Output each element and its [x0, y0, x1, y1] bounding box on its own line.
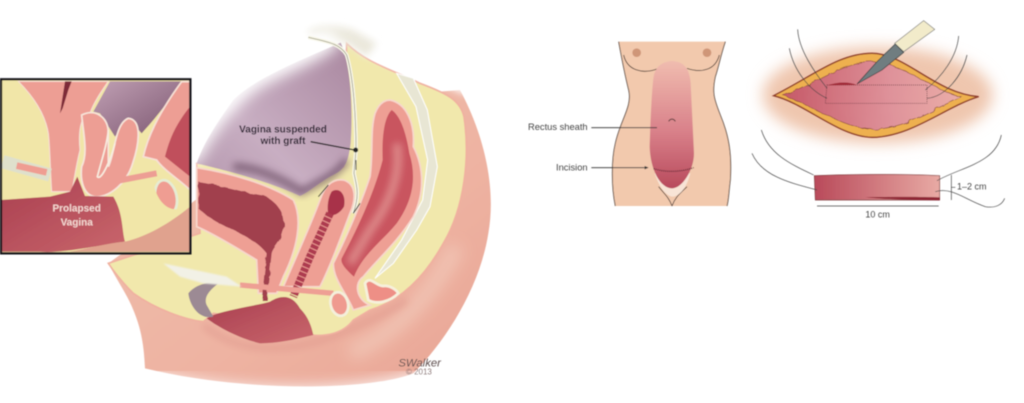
inset label: prolapsed vagina [53, 203, 101, 228]
inset label: prolapsed vagina: Prolapsed [53, 203, 101, 214]
fat border [774, 53, 979, 137]
cavity bottom shadow [233, 160, 347, 192]
vulva and vestibule [207, 297, 313, 343]
vaginal canal [293, 213, 330, 297]
callout: vagina suspended with graft: with graft [260, 136, 306, 147]
dimension: 10 cm [817, 206, 939, 220]
signature: SWalker [398, 358, 442, 370]
label: rectus sheath: Rectus sheath [528, 122, 588, 132]
body skin [108, 90, 491, 387]
inset lower flesh [1, 177, 125, 252]
sacrum [375, 73, 437, 278]
torso [612, 42, 731, 206]
dimension: 1-2 cm: 1–2 cm [957, 181, 986, 191]
scalpel [857, 21, 935, 84]
incision dotted line [654, 168, 694, 171]
illustration: pelvic cross-section with suspended vagina [108, 26, 491, 394]
inset prolapsed folds [81, 113, 138, 197]
label: rectus sheath [528, 122, 657, 132]
inset left muscle band [3, 162, 50, 175]
navel [669, 119, 675, 121]
rectum wall [333, 100, 422, 310]
dimension: 10 cm: 10 cm [865, 210, 890, 220]
vagina wall [283, 180, 354, 287]
perineal muscle band [240, 285, 333, 293]
bladder lumen [198, 182, 284, 300]
signature [398, 358, 442, 377]
inset label: prolapsed vagina: Vagina [61, 217, 93, 228]
fat layer [108, 43, 466, 335]
inset rectal lumen [165, 107, 190, 177]
inset fold slit [97, 130, 115, 177]
inset cavity [93, 81, 182, 137]
inset lower fat wedge [113, 182, 185, 242]
torso contour lines [612, 42, 731, 206]
inset pink oval [17, 166, 47, 172]
skin halo [763, 47, 993, 143]
callout: vagina suspended with graft [239, 125, 355, 150]
label: incision: Incision [556, 162, 588, 172]
skin highlight [350, 247, 457, 353]
inset frame [1, 79, 190, 253]
illustration: torso with rectus sheath [528, 42, 731, 206]
inset urethra and bladder wall [18, 81, 108, 192]
skin lower shadow [203, 300, 407, 348]
dotted strip outline [825, 85, 927, 103]
cut [827, 83, 857, 85]
strip sutures [752, 130, 1005, 207]
bottom white fade [140, 377, 420, 394]
nipples [632, 48, 711, 57]
inset dark cleft [60, 81, 72, 113]
cavity upper-left white fade [187, 35, 333, 160]
signature: © 2013 [406, 368, 432, 377]
graft strip [308, 37, 357, 213]
sutures [789, 29, 967, 98]
vaginal apex [328, 190, 345, 215]
dimension: 1-2 cm [951, 175, 986, 200]
pubic bone [188, 283, 218, 317]
label: incision [556, 162, 649, 172]
abdominal cavity [197, 43, 352, 196]
inset skin corner [70, 207, 190, 252]
rectus sheath [650, 61, 694, 188]
inset perineal band [113, 173, 157, 182]
graft line [308, 37, 357, 213]
oval muscle [328, 290, 351, 318]
illustration: fascial strip with dimensions [752, 130, 1005, 220]
rectum folds [350, 143, 398, 263]
illustration: opened incision with scalpel [763, 21, 993, 143]
callout: vagina suspended with graft: Vagina suspended [239, 125, 327, 136]
inset rectum wall [143, 82, 190, 190]
ligament wedge [163, 263, 242, 287]
inset sphincter [152, 178, 180, 217]
pale crescent [655, 173, 690, 197]
anal sphincter [365, 280, 398, 302]
stippled tissue above graft [307, 26, 377, 57]
bladder wall [197, 168, 298, 293]
graft sutures [318, 148, 360, 213]
strip [814, 174, 940, 200]
fascia bed [784, 62, 962, 129]
fat upper white fade [363, 47, 467, 90]
rectum lumen [341, 110, 413, 277]
strip underside [865, 197, 940, 200]
panel: inset prolapsed vagina [1, 79, 191, 253]
